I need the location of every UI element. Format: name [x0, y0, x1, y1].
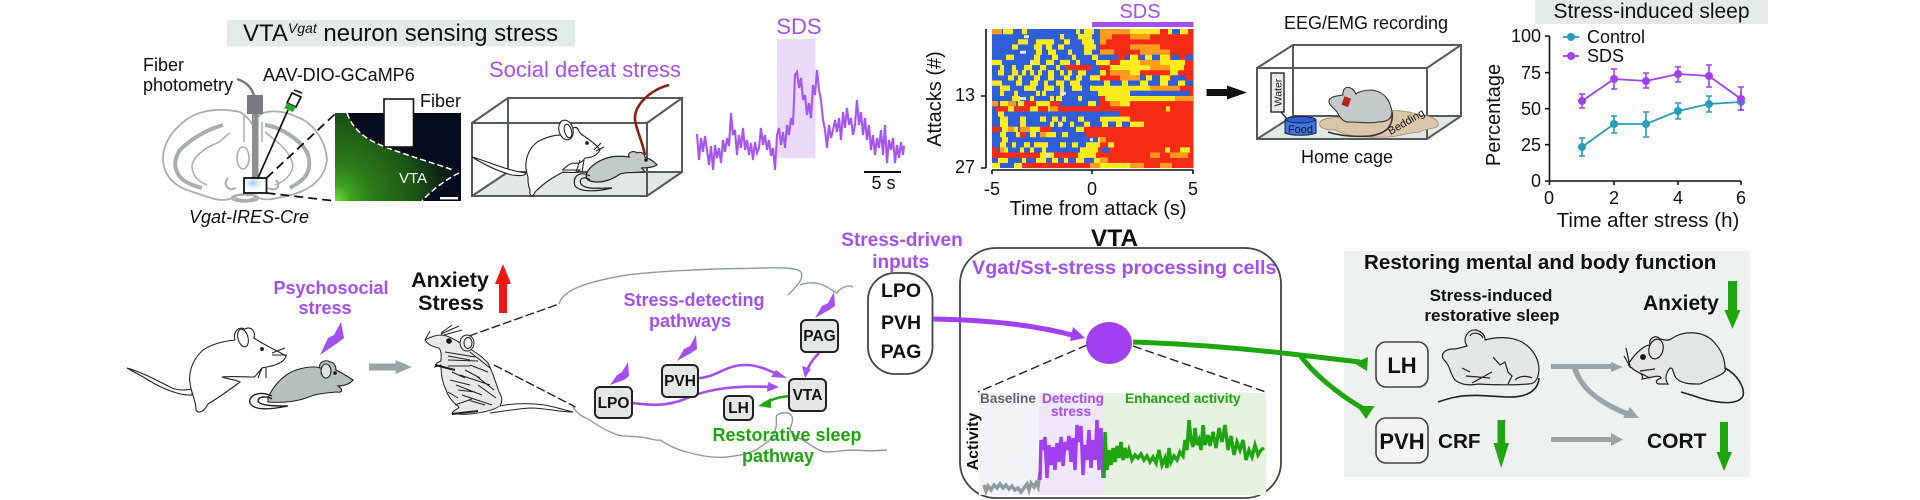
gray defeated mouse — [574, 152, 657, 191]
activity zone labels: stress — [1051, 404, 1091, 419]
heading: Restoring mental and body function: Restoring mental and body function — [1364, 251, 1716, 274]
green output pathway — [1133, 342, 1362, 408]
water bottle — [1271, 73, 1287, 119]
inputs pill: PVH — [881, 312, 921, 334]
blue virus injection glow — [242, 174, 264, 192]
series: SDS — [1578, 65, 1745, 110]
series: Control — [1578, 92, 1745, 156]
activity zone labels: Detecting — [1042, 391, 1104, 406]
attacking mouse bottom row — [127, 328, 287, 412]
sagittal brain outline — [559, 268, 887, 457]
label: Fiber: Fiber — [420, 91, 461, 111]
heatmap x axis labels: 5 — [1188, 179, 1198, 199]
micrograph VTA — [335, 99, 461, 201]
red-brown fiber tether — [635, 85, 669, 155]
label: CRF: CRF — [1438, 430, 1481, 453]
label: Psychosocial stress: stress — [298, 298, 352, 318]
region box: PVH — [1376, 418, 1428, 463]
label: Stress-induced restorative sleep — [1424, 286, 1560, 325]
standing rat, right — [1624, 333, 1743, 403]
chart legend: Control — [1587, 27, 1645, 47]
activity zone labels: Enhanced activity — [1125, 391, 1241, 406]
photometry trace — [697, 70, 904, 170]
gray mouse bottom row — [250, 361, 353, 409]
heatmap x axis labels: -5 — [984, 179, 1000, 199]
label: CORT: CORT — [1647, 430, 1707, 453]
heatmap — [992, 29, 1194, 168]
fiber photometry labels: photometry — [143, 75, 233, 95]
region box: PVH: PVH — [1379, 429, 1425, 454]
heatmap y axis labels — [924, 51, 975, 177]
label: Stress-detecting pathways: Stress-detecting — [623, 290, 765, 310]
heading: VTA Vgat neuron sensing stress: neuron sensing stress — [317, 20, 558, 47]
brain region labels: VTA — [793, 387, 822, 404]
green pathway arrow — [758, 396, 789, 408]
brain region labels: PVH — [664, 373, 696, 390]
label: AAV-DIO-GCaMP6: AAV-DIO-GCaMP6 — [263, 65, 415, 85]
label: Anxiety Stress: Stress — [418, 291, 484, 315]
axis title: Time after stress: Time after stress (h) — [1557, 209, 1739, 232]
label: Stress-detecting pathways: pathways — [649, 311, 731, 331]
purple input arrow — [933, 319, 1085, 341]
trace scale bar 5 s — [864, 171, 901, 193]
label: Stress-induced restorative sleep: Stress-induced — [1430, 286, 1552, 305]
label: Home cage: Home cage — [1301, 147, 1393, 167]
water bottle: Water — [1272, 78, 1284, 106]
inputs pill: PAG — [881, 341, 921, 363]
gray arrows — [1551, 362, 1639, 446]
zoom box with dashed lines — [244, 114, 335, 201]
activity zone labels: Baseline — [980, 391, 1036, 406]
green output terminals — [1354, 357, 1374, 419]
micrograph VTA: VTA — [399, 170, 427, 187]
region box: LH: LH — [1387, 353, 1417, 378]
label: Stress-induced restorative sleep: restorative sleep — [1424, 306, 1560, 325]
brain region labels: LPO — [598, 395, 629, 412]
social defeat cage — [472, 98, 682, 196]
heatmap y axis labels: 13 — [955, 85, 975, 105]
panel: VTA box — [960, 248, 1281, 498]
heatmap SDS bar and label: SDS — [1119, 1, 1161, 23]
line chart tick labels: 50 — [1521, 99, 1541, 119]
brain region labels: PAG — [803, 328, 836, 345]
lightning bolt — [320, 322, 344, 355]
activity background zones — [979, 393, 1266, 495]
label: Vgat-IRES-Cre: Vgat-IRES-Cre — [189, 207, 309, 227]
inputs pill: LPO — [881, 280, 921, 302]
heatmap x axis labels — [984, 179, 1198, 220]
black arrow — [1206, 86, 1247, 100]
syringe — [258, 90, 302, 178]
heading: VTA Vgat neuron sensing stress — [227, 20, 575, 47]
heading: VTA Vgat neuron sensing stress: VTA — [243, 20, 288, 47]
label: Anxiety Stress: Anxiety — [411, 268, 489, 292]
heatmap x axis labels: 0 — [1087, 179, 1097, 199]
line chart tick labels: 100 — [1511, 26, 1541, 46]
activity trace enhanced — [1104, 420, 1264, 478]
food bowl: Food — [1288, 124, 1313, 136]
sleeping mouse — [1438, 330, 1539, 402]
label: Psychosocial stress — [273, 278, 389, 318]
label: Activity: Activity — [965, 412, 982, 470]
inputs pill — [868, 273, 932, 374]
label: Restorative sleep pathway: Restorative sleep — [712, 425, 862, 445]
brain region labels: LH — [728, 400, 749, 417]
chart legend — [1563, 27, 1645, 66]
label: Stress-detecting pathways — [623, 290, 765, 331]
heatmap x axis labels: Time from attack (s) — [1009, 198, 1187, 220]
fiber photometry labels — [143, 55, 233, 95]
label: Stress-driven inputs: inputs — [872, 252, 929, 273]
SDS highlight band and label: SDS — [776, 14, 822, 39]
green down arrow: anxiety — [1724, 281, 1740, 329]
label: EEG/EMG recording: EEG/EMG recording — [1284, 13, 1448, 33]
heading: Stress-induced sleep: Stress-induced sleep — [1553, 0, 1750, 23]
label: Stress-driven inputs — [841, 230, 963, 273]
bedding — [1320, 107, 1438, 138]
green down arrow: CORT — [1716, 422, 1732, 471]
label: Anxiety: Anxiety — [1643, 292, 1719, 315]
trace scale bar 5 s: 5 s — [871, 173, 896, 193]
label: Anxiety Stress — [411, 268, 489, 315]
axis title: Percentage: Percentage — [1483, 64, 1505, 166]
heatmap SDS bar and label — [1092, 1, 1194, 27]
label: Restorative sleep pathway — [712, 425, 862, 466]
heatmap y axis labels: 27 — [955, 157, 975, 177]
heatmap axes — [981, 29, 1194, 174]
label: Social defeat stress: Social defeat stress — [489, 57, 681, 82]
VTA neuron — [1086, 322, 1132, 364]
brain region labels — [598, 328, 836, 417]
line chart axes — [1545, 36, 1741, 185]
line chart tick labels: 25 — [1521, 135, 1541, 155]
activity trace baseline — [984, 472, 1040, 492]
standing rat — [425, 325, 573, 414]
region boxes in brain — [595, 320, 838, 420]
purple pathway arrows — [632, 353, 819, 405]
activity zone labels — [980, 391, 1241, 419]
panel: restoring mental and body function — [1344, 251, 1750, 477]
activity trace detecting stress — [1040, 420, 1103, 480]
lightning bolts — [610, 292, 835, 385]
home cage — [1257, 45, 1461, 139]
sleeping mouse in cage — [1328, 87, 1392, 136]
line chart tick labels: 0 — [1531, 171, 1541, 191]
label: Stress-driven inputs: Stress-driven — [841, 230, 963, 251]
SDS highlight band and label — [776, 14, 822, 158]
white attacking mouse — [472, 119, 604, 196]
green down arrow: CRF — [1494, 420, 1509, 468]
coronal brain section — [163, 110, 327, 202]
food bowl — [1285, 116, 1316, 136]
heatmap y axis labels: Attacks (#) — [924, 51, 946, 147]
gray arrow — [369, 360, 412, 374]
heading: VTA: VTA — [1091, 225, 1138, 252]
label: Psychosocial stress: Psychosocial — [273, 278, 389, 298]
dashed lines from cell to plot — [978, 345, 1266, 392]
bedding: Bedding — [1386, 107, 1427, 138]
label: Restorative sleep pathway: pathway — [742, 446, 814, 466]
dashed zoom lines to brain — [469, 304, 576, 407]
red up arrow — [495, 264, 511, 313]
line chart tick labels: 6 — [1736, 188, 1746, 208]
chart legend: SDS — [1587, 46, 1624, 66]
region box: LH — [1376, 342, 1428, 387]
fiber photometry cable and probe — [237, 79, 263, 178]
line chart tick labels: 2 — [1609, 188, 1619, 208]
label: Vgat/Sst-stress processing cells: Vgat/Sst-stress processing cells — [972, 257, 1277, 279]
line chart tick labels: 75 — [1521, 63, 1541, 83]
line chart tick labels — [1511, 26, 1746, 208]
heading: VTA Vgat neuron sensing stress: Vgat — [288, 20, 318, 36]
line chart tick labels: 0 — [1544, 188, 1554, 208]
line chart tick labels: 4 — [1673, 188, 1683, 208]
fiber photometry labels: Fiber — [143, 55, 184, 75]
